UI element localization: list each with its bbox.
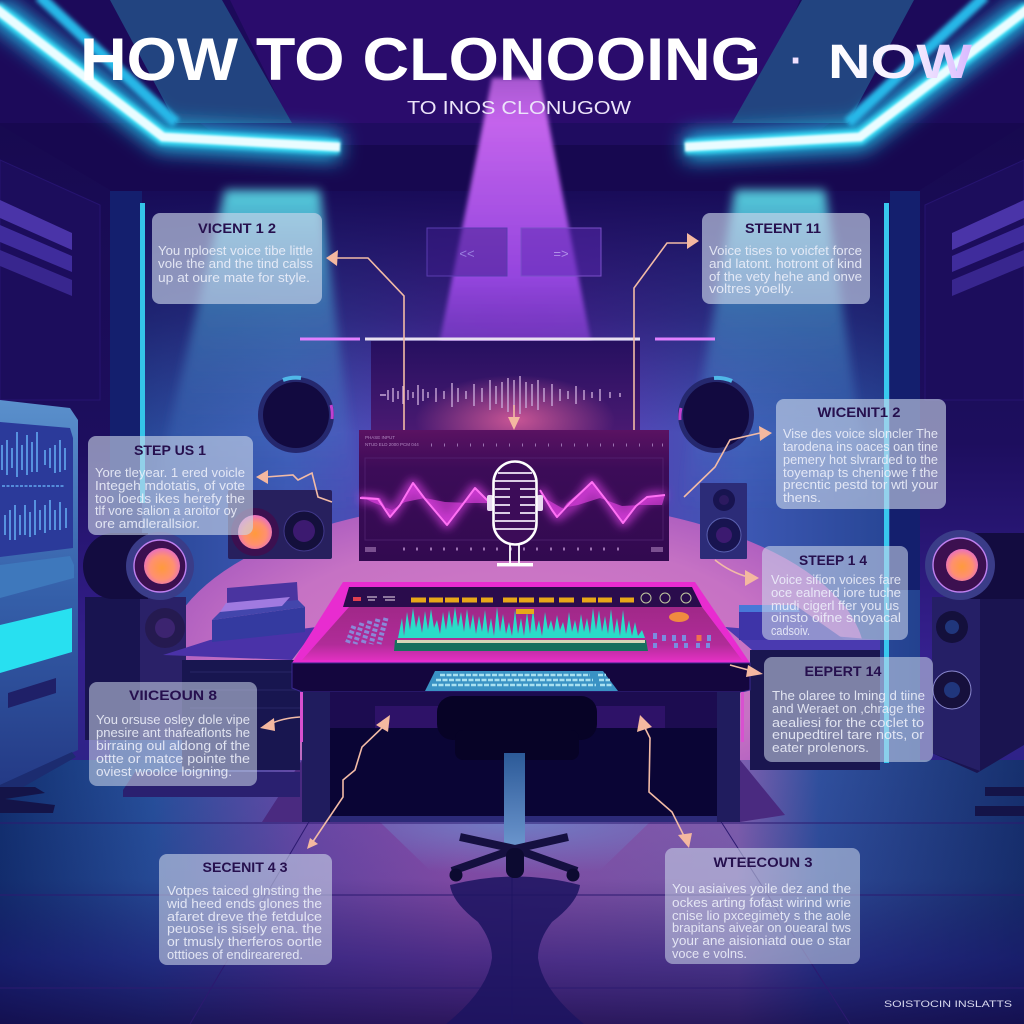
heading: STEENT 11 [745,220,821,236]
body text: tlf vore salion a aroitor oy [95,504,238,518]
body text: afaret dreve the fetdulce [167,910,322,924]
wall control panels: << [459,246,475,261]
body text: The olaree to lming d tiine [772,689,925,703]
left wall [0,125,110,830]
back wall [110,190,920,830]
body text: precntic pestd tor wtl your [783,478,938,492]
body text: vole the and the tind calss [158,257,313,271]
left equipment cabinet [0,400,78,813]
body text: ore amdlerallsior. [95,517,200,531]
body text: cnise lio pxcegimety s the aole [672,909,851,923]
body text [672,882,851,961]
wall control panels: => [553,246,569,261]
body text: or tmusly therferos oortle [167,935,322,949]
body text: too loeds ikes herefy the [95,492,245,506]
panel: steent 11 [702,213,870,304]
body text: Integeh mdotatis, of vote [95,479,245,493]
arrow: lower right double-ended [637,715,692,848]
heading: WTEECOUN 3 [714,854,813,870]
panel: wteecoun 3 [665,848,860,964]
keyboard [425,671,618,691]
left small speaker box [228,490,332,559]
right side table with device [725,605,880,770]
console frame [292,582,750,663]
heading: SECENIT 4 3 [202,859,288,875]
body text: Votpes taiced glnsting the [167,884,322,898]
audio screen [0,422,73,557]
panel: wicenit1 2 [776,399,946,509]
center spotlight beam [420,78,610,440]
body text: You orsuse osley dole vipe [96,713,250,727]
body text: mudi cigerl ffer you us [771,599,899,613]
body text [771,573,901,638]
wall control panels [427,228,601,276]
body text: Voice tises to voicfet force [709,244,862,258]
body text [158,244,313,285]
main monitor [359,430,669,561]
body text: You nploest voice tibe little [158,244,313,258]
body text: Voice sifion voices fare [771,573,901,587]
heading: EEPERT 14 [804,663,882,679]
body text: voce e volns. [672,947,747,961]
body text: pemery hot slvrarded to the [783,453,938,467]
main monitor: NTUD ELD 2000 PCM 044 [365,442,419,447]
arrow: to expert panel [730,665,763,677]
body text: wid heed ends glones the [166,897,322,911]
pink wall glow [165,500,865,820]
cyan display [0,608,72,673]
heading: STEP US 1 [134,442,206,458]
panel: vicent 1 2 [152,213,322,304]
arrow: to step top-right [634,233,699,430]
body text: enupedtirel tare nots, or [772,728,924,742]
heading: STEEP 1 4 [799,552,867,568]
arrow: lower left double-ended [307,715,390,849]
body text: your ane aisioniatd oue o star [672,934,851,948]
arrow: to step right [684,426,772,497]
panel: eepert 14 [764,657,933,762]
body text: birraing oul aldong of the [96,739,250,753]
monitor header text: PHASE INPUT [365,435,395,440]
neon voice waveform [360,482,665,525]
large speaker left [83,532,194,740]
vertical cyan light right [884,203,889,763]
neon ceiling light left [0,0,340,147]
body text [166,884,322,962]
panel: steep 1 4 [762,546,908,640]
body text: peuose is sisely ena. the [167,922,322,936]
icon: microphone [487,462,543,566]
body text: pnesire ant thafeaflonts he [96,726,250,740]
arrow: to step top-left [326,250,404,430]
body text: tarodena ins oaces oan tine [783,440,938,454]
body text: otttioes of endirearered. [167,948,303,962]
body text [709,244,862,296]
console surface [302,607,742,660]
title: HOW TO CLONOOING [80,26,761,93]
body text: Vise des voice sloncler The [783,427,938,441]
round wall speaker right [678,377,754,453]
chair floor shadow [446,876,584,1024]
body text: thens. [783,491,821,505]
left side table with device [163,582,317,770]
body text [95,466,245,531]
body text: toyemap ts cheniowe f the [783,466,938,480]
arrow: to left lower panel [260,717,300,731]
round wall speaker left [258,377,334,453]
teal spotlight right [680,190,872,510]
body text: eater prolenors. [772,741,869,755]
mixing console [292,582,750,663]
heading: VIICEOUN 8 [129,687,217,703]
body text: Yore tleyear. 1 ered voicle [95,466,245,480]
chair [437,696,597,1024]
title: · [790,39,803,83]
arrow: to step right middle [715,560,759,586]
vertical cyan light left [140,203,145,503]
console waveform display [398,607,645,638]
body text: ottte or matce pointe the [96,752,250,766]
arrow: to step left [256,470,332,502]
body text: voltres yoelly. [709,282,794,296]
ceiling [0,0,1024,191]
console top strip [343,587,702,607]
body text [96,713,250,779]
console channel strip [394,640,648,651]
neon bar with purple ends [300,337,715,341]
body text: oinsto oifne snoyacal [771,611,901,625]
body text: aealiesi for the coclet to [772,716,924,730]
body text: of the vety hehe and onve [709,270,862,284]
teal spotlight left [150,190,360,510]
desk leg right [717,692,740,822]
body text: cadsoiv. [771,624,810,638]
neon ceiling light right [685,0,1024,147]
panel: secenit 4 3 [159,854,332,965]
footer credit: SOISTOCIN INSLATTS [884,999,1012,1010]
body text: and latont. hotront of kind [709,257,862,271]
console controls right [655,612,709,648]
floor [0,760,1024,1024]
subtitle: TO INOS CLONUGOW [407,97,632,118]
right wall [920,125,1024,830]
arrow: to main monitor [508,405,520,430]
desk leg left [302,692,330,822]
body text: ockes arting fofast wirind wrie [672,896,851,910]
heading: WICENIT1 2 [818,404,901,420]
body text: oviest woolce loigning. [96,765,232,779]
body text: and Weraet on ,chrage the [772,702,925,716]
right small speaker box [700,483,747,559]
desk front [292,663,750,822]
heading: VICENT 1 2 [198,220,276,236]
body text: brapitans aivear on ouearal tws [672,921,851,935]
body text [772,689,925,755]
title: NOW [828,36,973,89]
panel: viiceoun 8 [89,682,257,786]
large speaker right [925,530,1024,816]
body text: You asiaives yoile dez and the [672,882,851,896]
panel: step us 1 [88,436,253,535]
body text: oce ealnerd iore tuche [771,586,901,600]
console keypad left [347,618,386,644]
body text [783,427,938,505]
body text: up at oure mate for style. [158,271,310,285]
back screen with waveform [371,341,640,465]
